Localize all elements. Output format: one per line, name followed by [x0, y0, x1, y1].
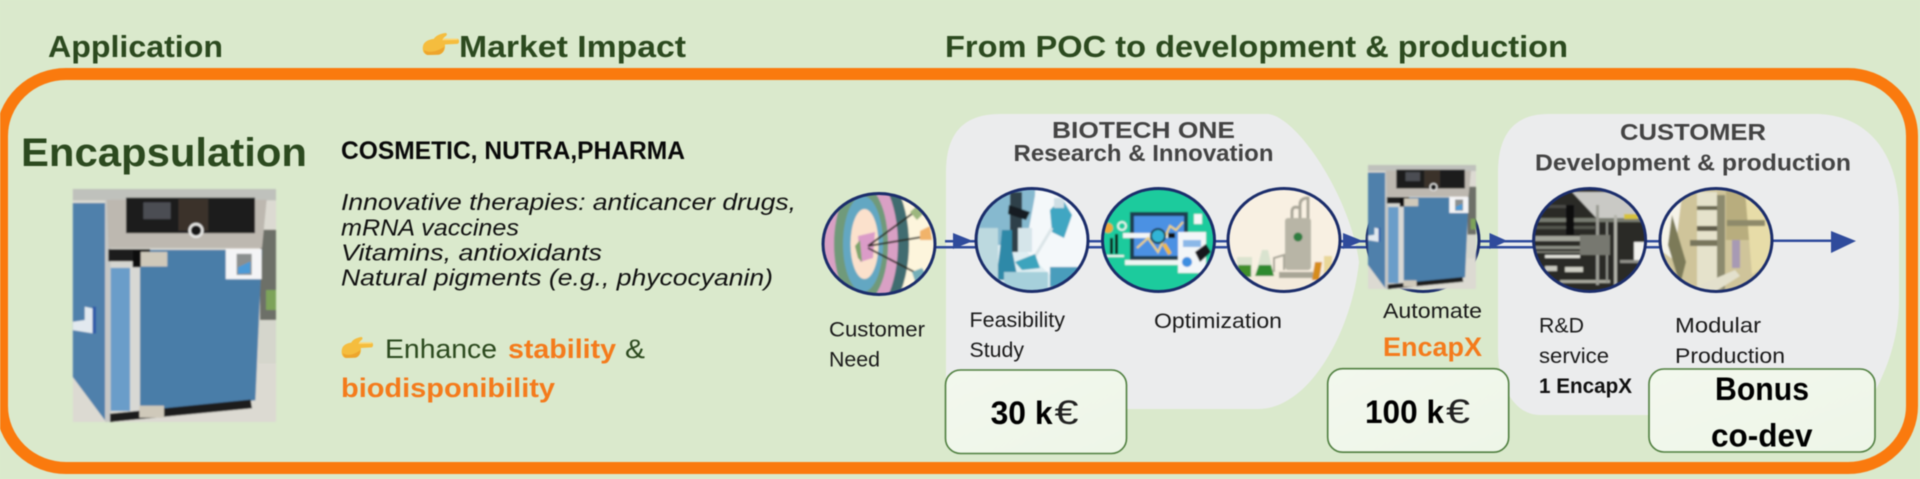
process line with arrows [936, 231, 1856, 253]
price box: 30 k€ [946, 370, 1126, 454]
group: Customer heading: Development & production [1535, 150, 1851, 176]
group: Customer heading [1535, 119, 1851, 176]
bonus box: Bonus co-dev: co-dev [1711, 418, 1813, 454]
price box: 30 k€: 30 k [991, 395, 1053, 431]
title: Encapsulation: Encapsulation [21, 131, 307, 175]
icon: modular production photo [1655, 185, 1780, 295]
image: encapsulation oven [73, 189, 276, 422]
panel: Customer background [1498, 114, 1899, 415]
callout: enhance stability and biodisponibility: & [625, 334, 645, 364]
label: R&D service 1 EncapX: 1 EncapX [1539, 375, 1632, 398]
panel: application [21, 131, 307, 422]
price box: 100 k€ [1328, 369, 1509, 452]
label: Modular Production [1675, 315, 1785, 368]
label: Modular Production: Production [1675, 345, 1785, 368]
callout: enhance stability and biodisponibility: stability [508, 334, 616, 364]
price box: 100 k€: € [1446, 393, 1470, 431]
icon: laboratory pipette [970, 185, 1095, 295]
label: Optimization: Optimization [1154, 310, 1282, 333]
label: EncapX: EncapX [1383, 332, 1482, 362]
label: R&D service 1 EncapX: R&D [1539, 315, 1584, 338]
image: EncapX oven [1368, 165, 1476, 289]
label: Feasibility Study: Feasibility [970, 309, 1065, 332]
text: applications list: Innovative therapies: anticancer drugs, [341, 189, 796, 215]
bonus box: Bonus co-dev: Bonus [1715, 371, 1809, 407]
label: Modular Production: Modular [1675, 315, 1761, 338]
price box: 30 k€: € [1054, 394, 1079, 432]
label: Feasibility Study: Study [970, 339, 1025, 362]
text: applications list [341, 189, 796, 290]
label: Customer Need [829, 319, 925, 372]
label: R&D service 1 EncapX: service [1539, 345, 1609, 368]
heading: From POC to development & production: From POC to development & production [945, 29, 1568, 64]
group: Biotech One heading: Research & Innovation [1014, 140, 1274, 166]
step: automate EncapX [1367, 165, 1482, 362]
icon: pointing hand [423, 33, 459, 55]
icon: analytics dashboard [1100, 185, 1220, 295]
bonus box: Bonus co-dev [1649, 369, 1875, 454]
icon: pointing hand [342, 337, 373, 358]
panel: Biotech One background [946, 114, 1359, 409]
group: Customer heading: CUSTOMER [1620, 119, 1766, 145]
group: Biotech One heading: BIOTECH ONE [1052, 117, 1235, 143]
label: Feasibility Study [970, 309, 1065, 362]
text: applications list: Vitamins, antioxidants [341, 240, 603, 266]
text: applications list: mRNA vaccines [341, 214, 520, 240]
icon: bioreactor and flasks [1225, 185, 1345, 295]
icon: R&D plant photo [1530, 185, 1650, 295]
text: applications list: Natural pigments (e.g., phycocyanin) [341, 264, 773, 290]
heading: Application: Application [48, 29, 223, 64]
decorative hidden circle [1367, 188, 1479, 292]
label: Automate: Automate [1383, 300, 1482, 323]
heading: Market Impact: Market Impact [459, 29, 686, 64]
text: sectors: COSMETIC, NUTRA,PHARMA [341, 137, 685, 165]
label: Customer Need: Need [829, 349, 880, 372]
label: Customer Need: Customer [829, 319, 925, 342]
label: R&D service 1 EncapX [1539, 315, 1632, 398]
callout: enhance stability and biodisponibility [341, 334, 645, 403]
price box: 100 k€: 100 k [1365, 394, 1444, 430]
panel: market impact [341, 137, 796, 403]
icon: target with arrows [820, 191, 938, 297]
group: Biotech One heading [1014, 117, 1274, 166]
callout: enhance stability and biodisponibility: biodisponibility [341, 373, 555, 403]
step: customer need [820, 191, 938, 368]
callout: enhance stability and biodisponibility: Enhance [385, 334, 497, 364]
